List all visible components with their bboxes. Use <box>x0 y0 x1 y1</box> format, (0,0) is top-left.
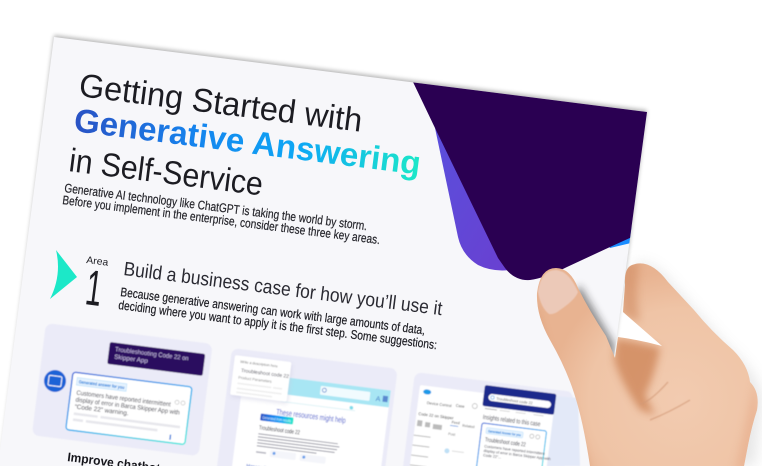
browser window: Troubleshoot code 22 <box>259 425 301 437</box>
header shape: dark purple <box>413 82 650 280</box>
search popup: Write a description here <box>240 360 278 368</box>
section paragraph: deciding where you want to apply it is the first step. Some suggestions: <box>118 298 438 352</box>
search popup: Troubleshoot code 22 <box>241 368 289 380</box>
area number <box>86 256 108 306</box>
insights panel: display of error in Barca Skipper App with <box>483 449 551 461</box>
generated answer box: Customers have reported intermittent <box>76 390 171 408</box>
pale side panel <box>551 398 580 466</box>
generated button <box>260 413 294 425</box>
browser window: A <box>375 396 381 403</box>
palm crease <box>640 382 690 420</box>
chat question bubble: Troubleshooting Code 22 on <box>115 346 189 363</box>
section paragraph: Because generative answering can work with large amounts of data, <box>120 285 426 337</box>
search popup: Product Parameters <box>238 376 272 384</box>
crm window: Code 22 on Skipper <box>418 411 454 421</box>
header shape: blue accent <box>610 226 632 248</box>
chat question bubble: Skipper App <box>114 354 149 365</box>
insights panel <box>476 408 556 466</box>
insights panel: Customers have reported intermittent <box>484 444 545 456</box>
search popup <box>230 355 293 404</box>
search header: Troubleshoot code 22 <box>496 397 533 405</box>
generated answer box <box>66 372 192 445</box>
hand base <box>537 263 758 466</box>
crm window: Feed <box>451 420 460 425</box>
browser window <box>230 372 391 466</box>
panel: chatbot card <box>32 323 213 466</box>
generated answer box: “Code 22” warning. <box>74 404 129 417</box>
insights panel: Troubleshoot code 22 <box>485 437 526 449</box>
title: Getting Started with <box>77 66 365 139</box>
browser window: Generated from results <box>262 416 292 423</box>
section heading: Build a business case for how you’ll use it <box>122 258 444 320</box>
title: in Self-Service <box>67 141 265 202</box>
title <box>70 74 420 195</box>
generated answer box: Generated answer for you <box>79 379 125 390</box>
hand <box>530 262 762 466</box>
crm window: Post <box>448 432 455 437</box>
insights panel: Code 22”... <box>483 453 501 460</box>
area number: Area <box>86 255 109 269</box>
insights panel: Generated Answer for you <box>488 429 521 437</box>
crm window: Device Control <box>427 401 452 408</box>
icon: chatbot avatar <box>44 370 66 392</box>
hand soft shadow <box>632 262 762 466</box>
intro paragraph: Before you implement in the enterprise, consider these three key areas. <box>62 193 381 247</box>
insights panel: Insights related to this case <box>482 414 541 428</box>
resources heading: These resources might help <box>276 407 347 425</box>
area number: 1 <box>83 259 106 317</box>
hand shading <box>530 262 762 466</box>
page shadow <box>0 35 647 466</box>
intro paragraph: Generative AI technology like ChatGPT is taking the world by storm. <box>64 181 368 233</box>
panel: resources card <box>214 348 398 466</box>
search header <box>482 385 556 415</box>
title: Generative Answering <box>72 101 423 182</box>
panel: case insights card <box>400 372 580 466</box>
crm window: Case <box>455 404 465 409</box>
icon: area arrow <box>50 250 77 299</box>
thumb shadow on page <box>576 282 616 356</box>
chat question bubble <box>107 342 205 376</box>
thumb nail <box>538 270 578 314</box>
header shape: violet accent <box>435 128 507 270</box>
generated answer box: display of error in Barca Skipper App with <box>75 397 181 417</box>
crm window <box>409 385 555 466</box>
crm window: Related <box>462 424 475 429</box>
